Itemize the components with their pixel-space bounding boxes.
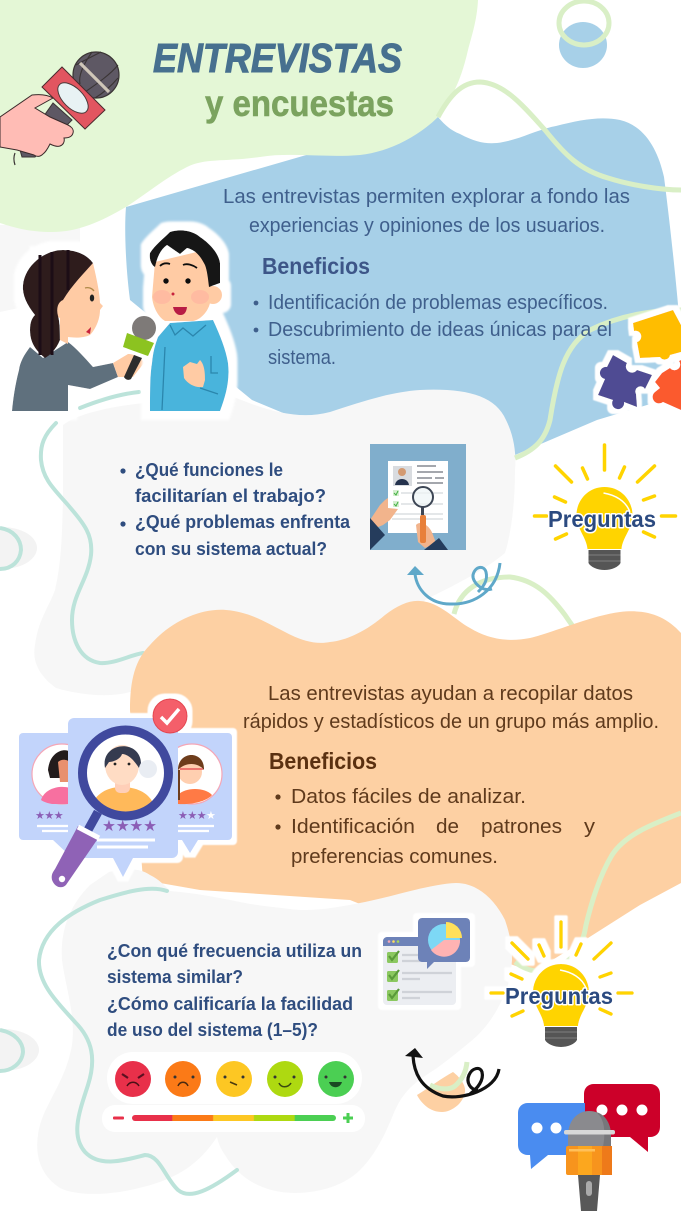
red flag [42,67,105,129]
eye and mouth [85,288,94,291]
decorative arc: teal left upper [0,528,21,569]
body [150,320,229,411]
icon: profile cards with magnifier [19,699,232,887]
orange piece [653,360,681,410]
background shape: green title blob [0,0,478,232]
label: Preguntas upper: Preguntas [548,506,656,532]
head [152,250,212,321]
left hand [370,498,398,528]
text block: interviews intro [223,185,630,237]
list: benefits of surveys: Datos fáciles de analizar. [291,785,526,808]
glass [533,964,589,1026]
base [588,550,620,570]
list: interview questions [120,459,351,559]
face: neutral [216,1061,252,1097]
face: very unhappy [115,1061,151,1097]
icon: hand holding microphone [0,52,119,165]
list: interview questions: ¿Qué problemas enfrenta [135,511,351,532]
decorative circle: grey left upper [0,527,37,569]
left card: ★★★ [35,810,64,822]
title [153,35,402,124]
hair [23,250,93,358]
base [545,1027,577,1047]
rays [534,445,676,539]
decorative line: teal lower [39,889,237,1194]
heading: Beneficios brown: Beneficios [269,748,377,774]
face: very happy [318,1061,354,1097]
decorative arc: teal left lower [0,1030,23,1071]
list: benefits of interviews: Identificación de problemas específicos. [268,291,608,314]
title line: y encuestas: y encuestas [205,83,394,124]
decorative line: teal upper [41,392,143,663]
list: interview questions: con su sistema actual? [135,538,327,559]
magnifier with portrait [52,730,168,887]
hand [113,354,144,377]
mouth [173,307,187,315]
chart bubble [418,918,470,962]
list: benefits of surveys: patrones [481,815,562,838]
hair [150,230,220,287]
decorative line: green middle [454,577,681,685]
list: benefits of interviews: sistema. [268,346,336,369]
label: Preguntas lower: Preguntas [505,983,613,1009]
main card: ★★★★ [102,818,157,835]
right card: ★★★ [178,810,207,822]
arrow: blue curl [407,563,500,604]
cheeks [153,290,171,304]
mic flag [123,333,154,356]
illustration: woman interviewer [12,250,144,411]
decorative shape: orange spot near arrow [417,1072,465,1112]
rays [491,922,632,1016]
rating faces [107,1052,362,1104]
decorative arc: green spot near arrow [430,1062,467,1089]
title line: ENTREVISTAS: ENTREVISTAS [153,35,402,81]
hand on chest [183,360,205,387]
hand [0,95,73,156]
left card [19,733,92,856]
decorative circle: grey left lower [0,1029,39,1071]
microphone handle [20,103,72,157]
mic collar [566,1146,612,1175]
arrow: black curl [405,1048,499,1097]
decorative ring: green top right [559,1,609,45]
jacket [12,342,118,411]
text block: survey questions: ¿Cómo calificaría la facilidad [107,993,353,1014]
text block: surveys intro: Las entrevistas ayudan a recopilar datos [268,682,633,705]
checklist panel [383,937,456,1005]
mic handle [124,355,142,380]
check badge [153,699,187,733]
text block: survey questions: de uso del sistema (1–5)? [107,1019,318,1040]
list: interview questions: facilitarían el trabajo? [135,485,326,506]
background shape: grey blob upper [34,390,515,695]
cable [14,153,15,165]
face: happy [267,1061,303,1097]
yellow piece [633,310,681,359]
white backing [107,1052,362,1104]
text block: surveys intro [243,682,659,733]
decorative shape: blue circle top right [559,22,607,68]
text block: survey questions [107,940,362,1040]
glass [576,487,632,549]
list: benefits of interviews [254,291,612,369]
list: benefits of surveys: y [584,815,596,838]
background shape: blue blob [125,117,681,455]
red bubble [584,1084,660,1152]
text block: surveys intro: rápidos y estadísticos de un grupo más amplio. [243,710,659,733]
background shape: orange blob [130,601,681,972]
magnifier [413,487,433,507]
text block: survey questions: sistema similar? [107,966,243,987]
icon: chat bubbles and microphone [518,1084,660,1211]
face [54,263,103,344]
right hand [416,523,436,548]
icon: light bulb upper [534,445,676,570]
heading: Beneficios blue: Beneficios [262,253,370,279]
list: interview questions: ¿Qué funciones le [135,459,283,480]
mic head [132,316,156,340]
illustration: man interviewee [150,230,229,411]
eyes [163,278,169,284]
mic head [568,1111,611,1147]
decorative line: green right [515,310,681,458]
background shape: light grey left patch [0,225,80,312]
text block: interviews intro: experiencias y opiniones de los usuarios. [249,214,605,237]
blue bubble [518,1103,585,1169]
icon: light bulb lower [491,922,632,1047]
text block: survey questions: ¿Con qué frecuencia utiliza un [107,940,362,961]
right card: ★ [206,810,216,822]
purple piece [598,355,652,409]
icon: puzzle pieces [598,310,681,410]
icon: survey with pie chart [383,918,470,1005]
decorative line: green lower [515,813,681,971]
list: benefits of surveys: Identificación [291,815,415,838]
mic handle [578,1175,600,1211]
text block: interviews intro: Las entrevistas permiten explorar a fondo las [223,185,630,208]
icon: resume with magnifier [370,444,466,550]
illustration: microphone held by woman [123,316,156,380]
list: benefits of surveys: de [436,815,459,838]
main card [68,718,178,877]
background shape: grey blob lower [37,869,512,1194]
list: benefits of surveys [275,785,596,868]
paper [388,461,448,533]
face: unhappy [165,1061,201,1097]
list: benefits of interviews: Descubrimiento de ideas únicas para el [268,318,612,341]
rating scale bar [102,1105,365,1132]
list: benefits of surveys: preferencias comunes. [291,845,498,868]
decorative line: green top [438,82,681,190]
microphone head [73,52,119,98]
right card [162,733,232,853]
